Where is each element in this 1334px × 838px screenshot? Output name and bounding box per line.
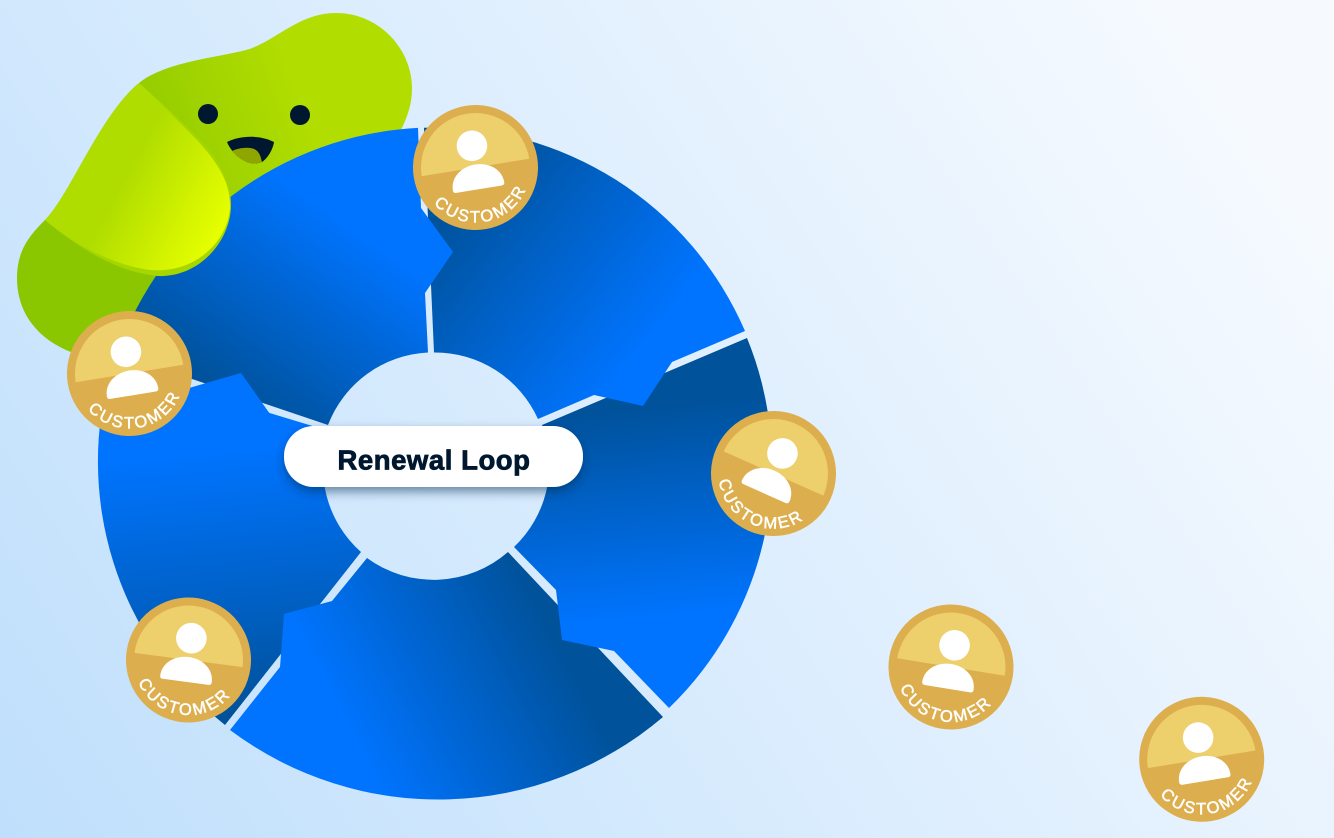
- segment 5: [98, 365, 361, 725]
- segment 4: [230, 552, 663, 800]
- badge: customer 6: CUSTOMER: [1162, 778, 1252, 815]
- center label: [284, 426, 583, 487]
- badge: customer 4: [126, 598, 251, 722]
- badge: customer 5: [888, 604, 1014, 730]
- badge: customer 6: [1139, 696, 1264, 822]
- badge: customer 1: CUSTOMER: [436, 186, 526, 223]
- badge: customer 1: [413, 105, 538, 230]
- arrow tip of segment 5: [189, 373, 270, 420]
- badge: customer 5: CUSTOMER: [902, 684, 992, 722]
- renewal loop wheel: [98, 128, 772, 800]
- center label: Renewal Loop: [337, 444, 531, 476]
- mascot body: [17, 13, 412, 360]
- badge: customer 4: CUSTOMER: [140, 678, 230, 716]
- badge: customer 3: [711, 411, 836, 536]
- badge: customer 2: [67, 311, 192, 436]
- mascot arm: [45, 83, 231, 276]
- segment 2: [424, 128, 745, 419]
- segment 1: [117, 128, 453, 425]
- segment 3: [514, 338, 772, 708]
- badge: customer 3: CUSTOMER: [720, 479, 803, 529]
- badge: customer 2: CUSTOMER: [90, 392, 180, 429]
